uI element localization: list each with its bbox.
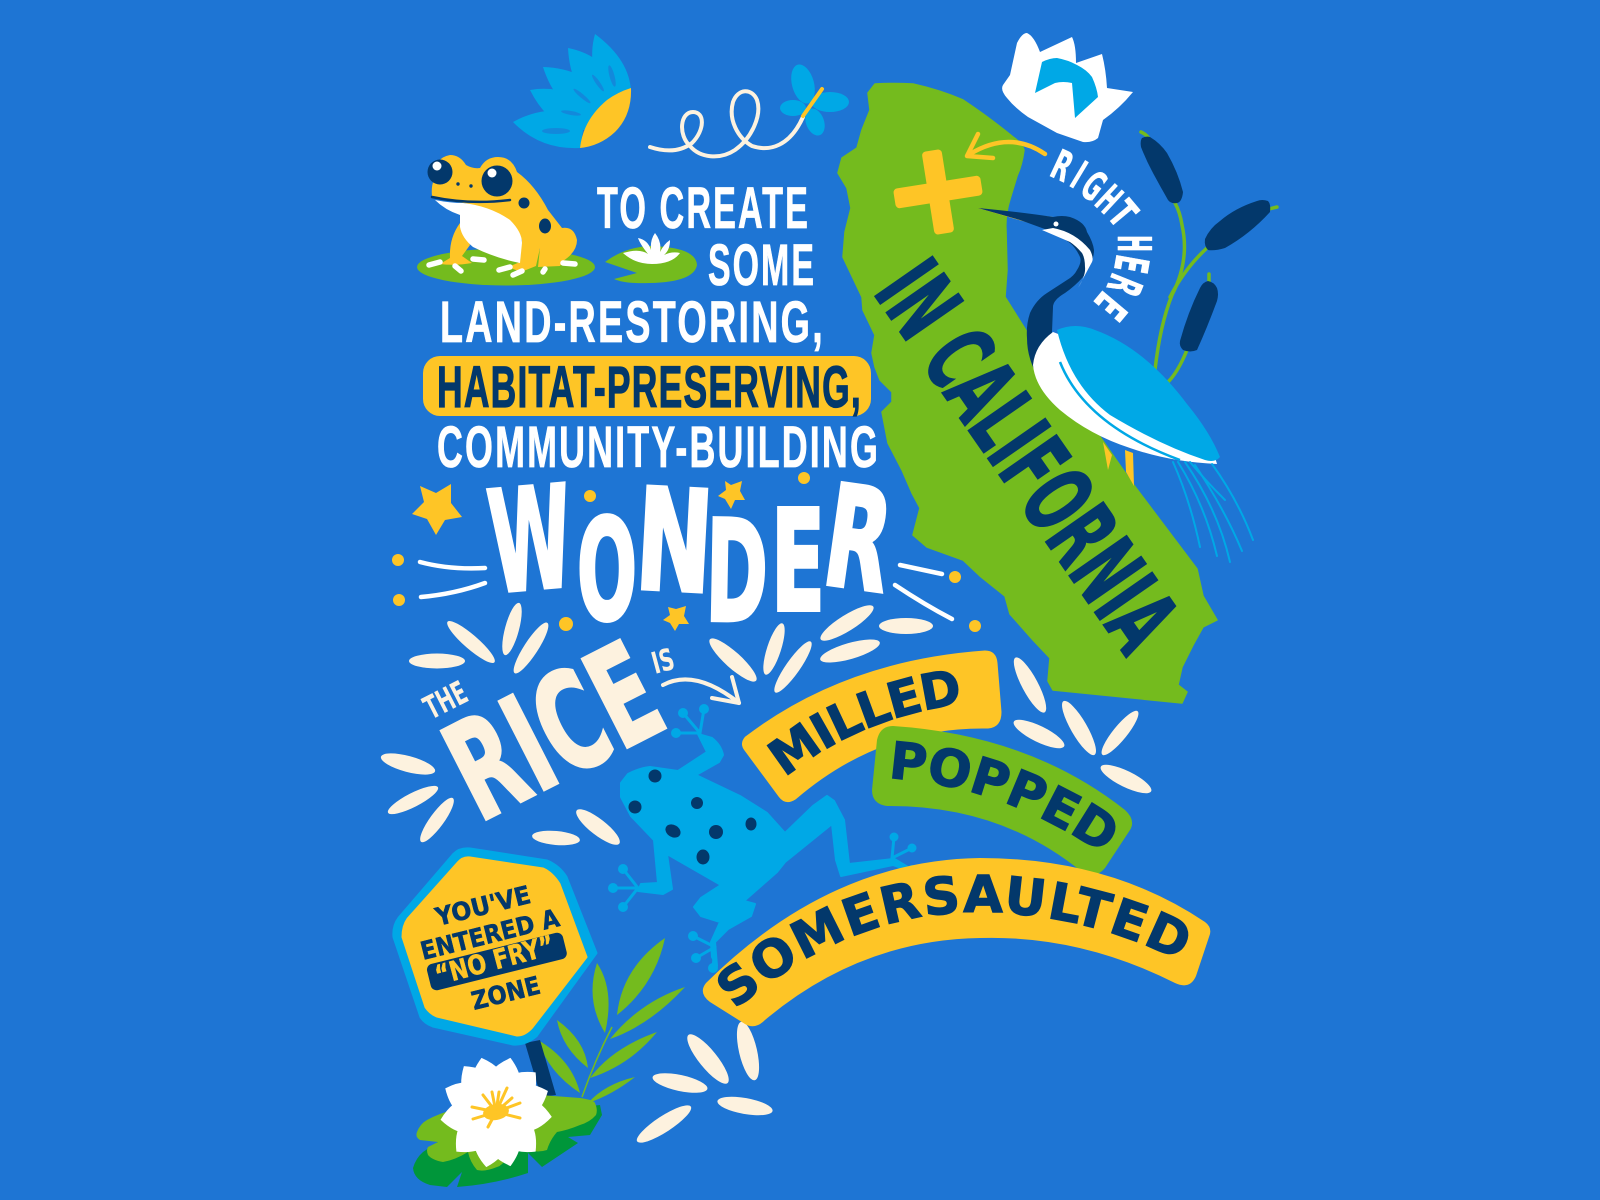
sign post (525, 1040, 556, 1097)
callout: habitat-preserving pill: HABITAT-PRESERVING, (437, 355, 862, 420)
illustration: blue frog (610, 706, 916, 972)
label: right here: E (1103, 251, 1159, 277)
banner: popped: POPPED (892, 740, 1116, 847)
icon: white lily with blue centre (1002, 33, 1133, 142)
label: right here: I (1063, 152, 1094, 198)
label: right here: T (1098, 192, 1147, 236)
heading: community-building: COMMUNITY-BUILDING (437, 415, 880, 480)
banner: milled: MILLED (766, 670, 958, 776)
icon: yellow plus location marker (888, 144, 988, 240)
sign: no fry zone: “NO FRY” (432, 930, 558, 992)
heading: to create some (597, 176, 816, 298)
burst lines around wonder (420, 562, 952, 619)
label: in California: IN CALIFORNIA (853, 241, 1200, 671)
callout: habitat-preserving pill (423, 355, 871, 420)
arrow: right here to the marker (967, 134, 1045, 158)
heading: to create some: TO CREATE (597, 176, 810, 241)
icon: lily pad with small white flower (605, 233, 697, 283)
label: right here: G (1072, 162, 1115, 211)
decorative stars and dots around wonder (392, 472, 981, 632)
label: the: THE (417, 673, 474, 727)
heading: wonder: E (771, 481, 825, 644)
icon: water lily on pad (413, 1054, 602, 1187)
icon: blue and yellow flower (513, 34, 631, 148)
icon: butterfly (780, 62, 849, 138)
sign: no fry zone: YOU'VE (432, 880, 534, 932)
heading: to create some: SOME (708, 233, 816, 298)
icon: squiggle flight trail (650, 91, 803, 156)
arrow: rice is to milled (663, 677, 739, 703)
sign: no fry zone: ZONE (468, 971, 543, 1016)
icon: leafy sprig (538, 938, 685, 1103)
icon: yellow frog on lily pad (417, 155, 595, 286)
label: right here: E (1084, 282, 1137, 330)
map: California (838, 84, 1217, 703)
heading: wonder: W (483, 456, 579, 626)
label: is: IS (648, 642, 678, 682)
heading: wonder: R (815, 455, 901, 626)
heading: rice: RICE (422, 614, 686, 852)
label: right here: R (1096, 267, 1153, 304)
label: right here: H (1086, 176, 1131, 223)
sign: no fry zone (394, 849, 596, 1044)
label: right here: H (1107, 235, 1161, 252)
banner: milled (742, 650, 1002, 802)
heading: wonder: D (704, 491, 769, 655)
heading: wonder (483, 455, 901, 655)
label: right here (1044, 141, 1161, 330)
icon: heron (978, 208, 1253, 562)
label: right here: R (1044, 141, 1080, 192)
rice grains (379, 600, 1155, 1148)
heading: wonder: O (577, 490, 637, 653)
banner: somersaulted: SOMERSAULTED (718, 874, 1188, 1006)
sign: no fry zone: ENTERED A (417, 903, 563, 966)
heading: wonder: N (632, 459, 717, 626)
heading: land-restoring: LAND-RESTORING, (440, 290, 825, 355)
icon: cattails (1141, 132, 1277, 382)
